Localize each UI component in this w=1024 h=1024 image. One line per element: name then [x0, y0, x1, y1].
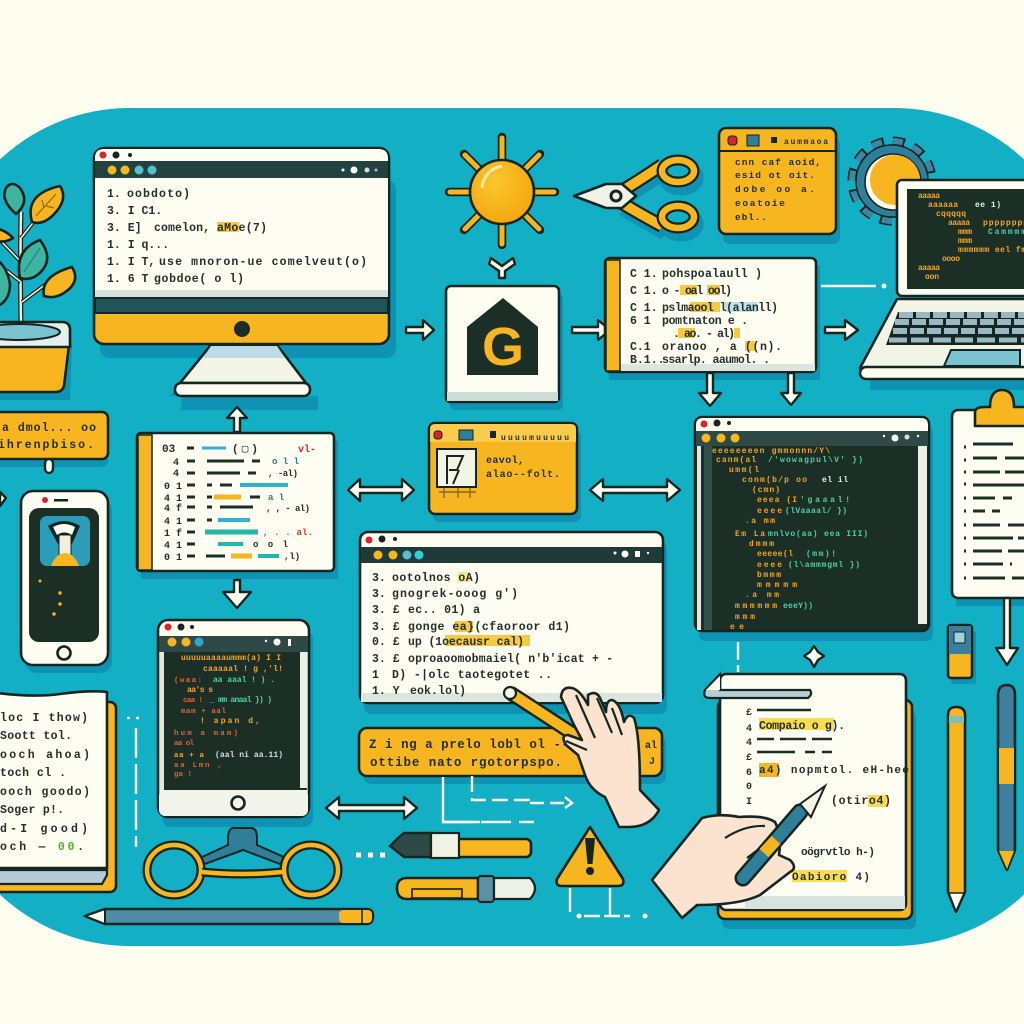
document: colored code lines: (▢) — [232, 444, 258, 456]
laptop screen: aaaaa — [918, 264, 940, 273]
tablet code lines: aa Lmn , — [174, 762, 222, 770]
code lines: eeeee(l — [757, 550, 793, 559]
monitor code text: use mnoron-ue comelveut(o) — [159, 256, 367, 269]
note: yellow code note: eoatoie — [735, 198, 785, 209]
tablet code lines — [174, 654, 283, 779]
keyboard — [886, 312, 1024, 345]
icon: pliers — [574, 160, 698, 236]
book: loc I thow) — [0, 712, 88, 725]
document: code list: C 1. — [630, 302, 658, 315]
document: colored code lines — [137, 433, 338, 579]
editor text lines: gonge ea}(cfaoroor d1) — [408, 621, 570, 634]
book: och — 00. — [0, 841, 84, 854]
code lines: ee — [730, 623, 744, 632]
notebook: (otiro4) — [831, 795, 891, 808]
tablet — [158, 620, 313, 827]
editor text lines: 3. — [372, 588, 386, 601]
notebook — [704, 674, 916, 929]
phone avatar — [40, 516, 90, 566]
monitor code text: 1. I q... — [107, 239, 169, 252]
note: yellow image note: alao--folt. — [486, 469, 560, 481]
document: colored code lines: 4 — [173, 469, 179, 480]
code lines: .a mm — [745, 517, 775, 526]
document: colored code lines: vl- — [298, 444, 316, 456]
editor text lines: 3. £ — [372, 604, 400, 617]
icon: long pencil — [85, 909, 373, 924]
tablet code lines: ! apan d, — [200, 717, 260, 726]
document: colored code lines: 0 1 — [164, 482, 182, 493]
note: yellow image note — [429, 423, 581, 522]
code lines: 'gaaal! — [800, 496, 850, 505]
document: code list: C 1. — [630, 268, 658, 281]
icon: yellow pencil — [948, 707, 965, 912]
code lines: mmmmmm — [735, 602, 777, 611]
document: colored code lines: ,l) — [284, 552, 300, 562]
banner: yellow text banner: ottibe nato rgotorpspo. — [370, 756, 562, 770]
editor text lines: 1. Y — [372, 685, 400, 698]
arrow: down to tablet — [223, 580, 251, 608]
code lines: umm(l — [729, 466, 759, 475]
tablet code lines: aa aaal ! ) . — [213, 676, 275, 685]
monitor code text: 3. E] — [107, 222, 142, 235]
editor text lines: oproaoomobmaiel( n'b'icat + - — [408, 653, 613, 666]
notebook: Oabioro 4) — [792, 872, 870, 884]
monitor code text: aMoe(7) — [217, 222, 267, 235]
banner: yellow text banner — [359, 728, 666, 784]
document: code list: . ao. - al) — [673, 328, 735, 341]
code lines: eeeeeeeen gmmonnn/Y\ — [712, 447, 830, 456]
document: code list: pohspoalaull ) — [662, 268, 762, 281]
note: yellow code note: ebl.. — [735, 212, 767, 223]
laptop screen: mmm — [958, 228, 972, 237]
arrow: house to document — [572, 320, 610, 340]
book: d-I good) — [0, 823, 88, 836]
laptop screen: mmm — [958, 237, 972, 246]
icon: small Y arrow — [489, 258, 515, 278]
document: colored code lines: , -al) — [268, 469, 298, 479]
notebook: oögrvtlo h-) — [801, 847, 875, 859]
laptop screen: ee 1) — [975, 201, 1001, 210]
tablet code lines: (waa: — [174, 677, 202, 685]
label: left yellow tag — [0, 412, 108, 467]
document: code list: B.1.. — [630, 354, 665, 367]
monitor code text: 3. I C1. — [107, 205, 162, 218]
document: code list: C.1 — [630, 341, 651, 354]
code lines: eeee — [757, 507, 782, 516]
icon: sun — [449, 137, 555, 245]
icon: marker pen — [390, 833, 531, 858]
laptop screen: aaaaa — [918, 192, 940, 201]
notebook: I — [746, 797, 752, 808]
monitor code text: 1. I T, — [107, 256, 155, 269]
code lines: (cmn) — [752, 486, 780, 495]
note: yellow code note: cnn caf aoid, — [735, 157, 821, 168]
document: colored code lines: , . . al. — [263, 528, 313, 538]
document: colored code lines: 4 f — [164, 503, 182, 515]
code lines: conm(b/p oo — [742, 476, 807, 485]
icon: glasses — [147, 828, 338, 895]
teal mid leaf — [19, 240, 47, 279]
yellow low leaf — [44, 267, 75, 297]
code lines: (mm)! — [806, 550, 836, 559]
connector: dots to pen — [356, 852, 388, 858]
card: house G icon — [446, 286, 563, 410]
laptop screen: mmmmmm eel fm — [958, 246, 1024, 255]
icon: potted plant — [0, 184, 75, 400]
arrow: document to laptop — [825, 320, 858, 340]
note: yellow code note — [719, 128, 840, 244]
monitor code text — [107, 188, 367, 286]
phone — [21, 491, 112, 673]
laptop screen: aaaaa — [948, 219, 970, 228]
editor text lines — [372, 572, 613, 698]
arrow: clipboard down — [996, 598, 1018, 665]
icon: capped pen — [397, 876, 535, 902]
code lines: mnlvo(aa) eea III) — [768, 530, 868, 539]
code lines: (l\ammmgml }) — [788, 561, 860, 570]
blue pen — [743, 786, 825, 878]
notebook: 4 — [746, 724, 752, 735]
code lines: canm(al — [716, 456, 756, 465]
tablet code lines: uuuuuaaaaummm(a) I I — [181, 654, 281, 663]
notebook: 6 — [746, 768, 752, 779]
hand with yellow pen — [504, 687, 659, 827]
monitor — [94, 148, 396, 410]
icon: small diamond — [804, 646, 824, 667]
connector: dashed to notebook — [737, 642, 739, 672]
editor text lines: eok.lol) — [410, 685, 466, 698]
arrow: up to monitor — [227, 407, 247, 432]
document: colored code lines: 4 1 — [164, 494, 182, 505]
card: house G icon: G — [482, 317, 524, 377]
document: code list: 6 1 — [630, 315, 651, 328]
teal top leaf — [4, 184, 24, 214]
note: yellow code note: esid ot oit. — [735, 170, 815, 181]
document: code list: o - oal ool) — [662, 285, 732, 298]
icon: warning triangle — [557, 827, 623, 886]
document: code list: pslmaool l(alanll) — [662, 302, 778, 315]
code lines: eeeY)) — [783, 602, 813, 611]
connector: line and dot to laptop — [821, 284, 886, 288]
tablet code lines: hum a mam) — [174, 730, 238, 738]
code lines: .a mm — [745, 591, 779, 600]
document: colored code lines: 4 1 — [164, 517, 182, 528]
arrow: double right — [590, 479, 680, 501]
tablet code lines: (aal ni aa.11) — [215, 751, 283, 760]
code lines: dmmm — [749, 540, 774, 549]
notebook: a4) nopmtol. eH-hee — [759, 765, 909, 777]
notebook: Compaio o g). — [759, 720, 845, 733]
tablet code lines: _ mm anaal }) ) — [209, 696, 272, 705]
monitor code text: 1. 6 T — [107, 273, 149, 286]
code lines: /'wowagpul\V' }) — [768, 456, 863, 465]
document: code list — [605, 258, 820, 380]
laptop screen: cqqqqq — [936, 210, 966, 219]
tablet code lines: caa ! — [183, 697, 203, 705]
notebook: 4 — [746, 738, 752, 749]
code lines: bmmm — [757, 571, 781, 580]
image thumbnail — [437, 449, 476, 498]
editor text lines: 0. £ — [372, 636, 400, 649]
note: yellow code note: aummaoa — [784, 138, 828, 147]
laptop screen: oon — [925, 273, 939, 282]
icon: blue pencil — [998, 685, 1015, 870]
laptop screen: aaaaaa — [928, 201, 958, 210]
yellow top leaf — [31, 186, 63, 223]
code lines: el il — [822, 476, 848, 485]
document: colored code lines: 0 1 — [164, 553, 182, 564]
code lines: eeee — [757, 561, 782, 570]
tablet code lines: caaaaal ! g ,'l! — [203, 665, 283, 674]
note: yellow code note: dobe oo a. — [735, 184, 815, 195]
document: code list: ssarlp. aaumol. . — [662, 354, 770, 367]
icon: gear — [852, 141, 932, 221]
document: colored code lines: , , - al) — [266, 504, 310, 514]
arrow: down from document right — [781, 373, 801, 405]
notebook: £ — [746, 753, 752, 764]
monitor code text: 1. — [107, 188, 121, 201]
document: code list: pomtnaton e . — [662, 315, 748, 328]
connector: dashed under warning — [570, 888, 648, 918]
tablet code lines: mam + aal — [181, 708, 226, 716]
hand with blue pen — [652, 786, 825, 918]
editor text lines: ec.. 01) a — [408, 604, 480, 617]
code lines: Em La — [735, 530, 765, 539]
document: colored code lines: 1 f — [164, 528, 182, 540]
laptop screen — [897, 180, 1024, 296]
connector: dashed line by book — [127, 718, 139, 847]
arrow: double tablet to pens — [326, 797, 417, 819]
book: Soger p!. — [0, 804, 64, 817]
document: colored code lines: 03 — [162, 444, 176, 456]
notebook: £ — [746, 708, 752, 719]
icon: small eraser — [948, 625, 976, 684]
connector: tag to phone — [45, 459, 53, 473]
monitor code text: comelon, — [154, 222, 210, 235]
editor text lines: ootolnos oA) — [392, 572, 480, 585]
book: Soott tol. — [0, 730, 72, 743]
editor text lines: up (1oecausr cal) — [408, 636, 524, 649]
editor text lines: D) -|olc taotegotet .. — [392, 669, 552, 682]
document: colored code lines: o l l — [272, 457, 300, 467]
book: ooch goodo) — [0, 786, 90, 799]
tablet code lines: aa ol — [174, 740, 194, 748]
banner: yellow text banner: Z i ng a prelo lobl ol -- — [369, 738, 569, 752]
book: ooch ahoa) — [0, 749, 90, 762]
connector: dashed routing lines — [443, 776, 572, 822]
monitor code text: oobdoto) — [127, 188, 190, 201]
tablet code lines: ga ! — [174, 771, 192, 779]
arrow: monitor to house — [406, 320, 434, 340]
code lines: mmm — [735, 613, 755, 622]
document: colored code lines: a l — [268, 493, 285, 503]
code window: main text editor — [360, 532, 667, 714]
book: toch cl . — [0, 767, 66, 780]
document: colored code lines: 4 — [173, 458, 179, 469]
document: code list: oranoo , a ((n). — [662, 341, 782, 354]
monitor stand — [175, 345, 310, 396]
code lines — [712, 447, 868, 632]
editor text lines: 3. £ — [372, 653, 400, 666]
arrow: left edge — [0, 492, 6, 506]
note: yellow image note: uuuumuuuuu — [501, 434, 569, 443]
document: colored code lines: o o l — [253, 540, 289, 550]
document: code list: C 1. — [630, 285, 658, 298]
clipboard — [952, 390, 1024, 606]
banner: yellow text banner: al — [645, 740, 657, 752]
label: left yellow tag: a dmol... oo — [2, 422, 96, 435]
label: left yellow tag: ihrenpbiso. — [0, 439, 94, 452]
banner: yellow text banner: J — [649, 757, 655, 768]
notebook: 0 — [746, 782, 752, 793]
code lines: eeea (I — [757, 496, 797, 505]
code window: dark editor — [695, 417, 933, 641]
code lines: (lVaaaal/ }) — [785, 507, 847, 516]
arrow: double left — [348, 479, 414, 501]
tablet code lines: aa's s — [187, 686, 213, 695]
laptop — [860, 180, 1024, 390]
tablet code lines: aa + a — [174, 752, 204, 760]
laptop screen: oooo — [942, 255, 960, 264]
document: colored code lines: 4 1 — [164, 541, 182, 552]
book — [0, 691, 116, 892]
monitor code text: gobdoe( o l) — [154, 273, 244, 286]
arrow: down from document left — [699, 373, 721, 406]
code lines: mmmmm — [757, 581, 797, 590]
editor text lines: 1 — [372, 669, 379, 682]
editor text lines: gnogrek-ooog g') — [392, 588, 518, 601]
editor text lines: 3. — [372, 572, 386, 585]
editor text lines: 3. £ — [372, 621, 400, 634]
note: yellow image note: eavol, — [486, 455, 524, 467]
